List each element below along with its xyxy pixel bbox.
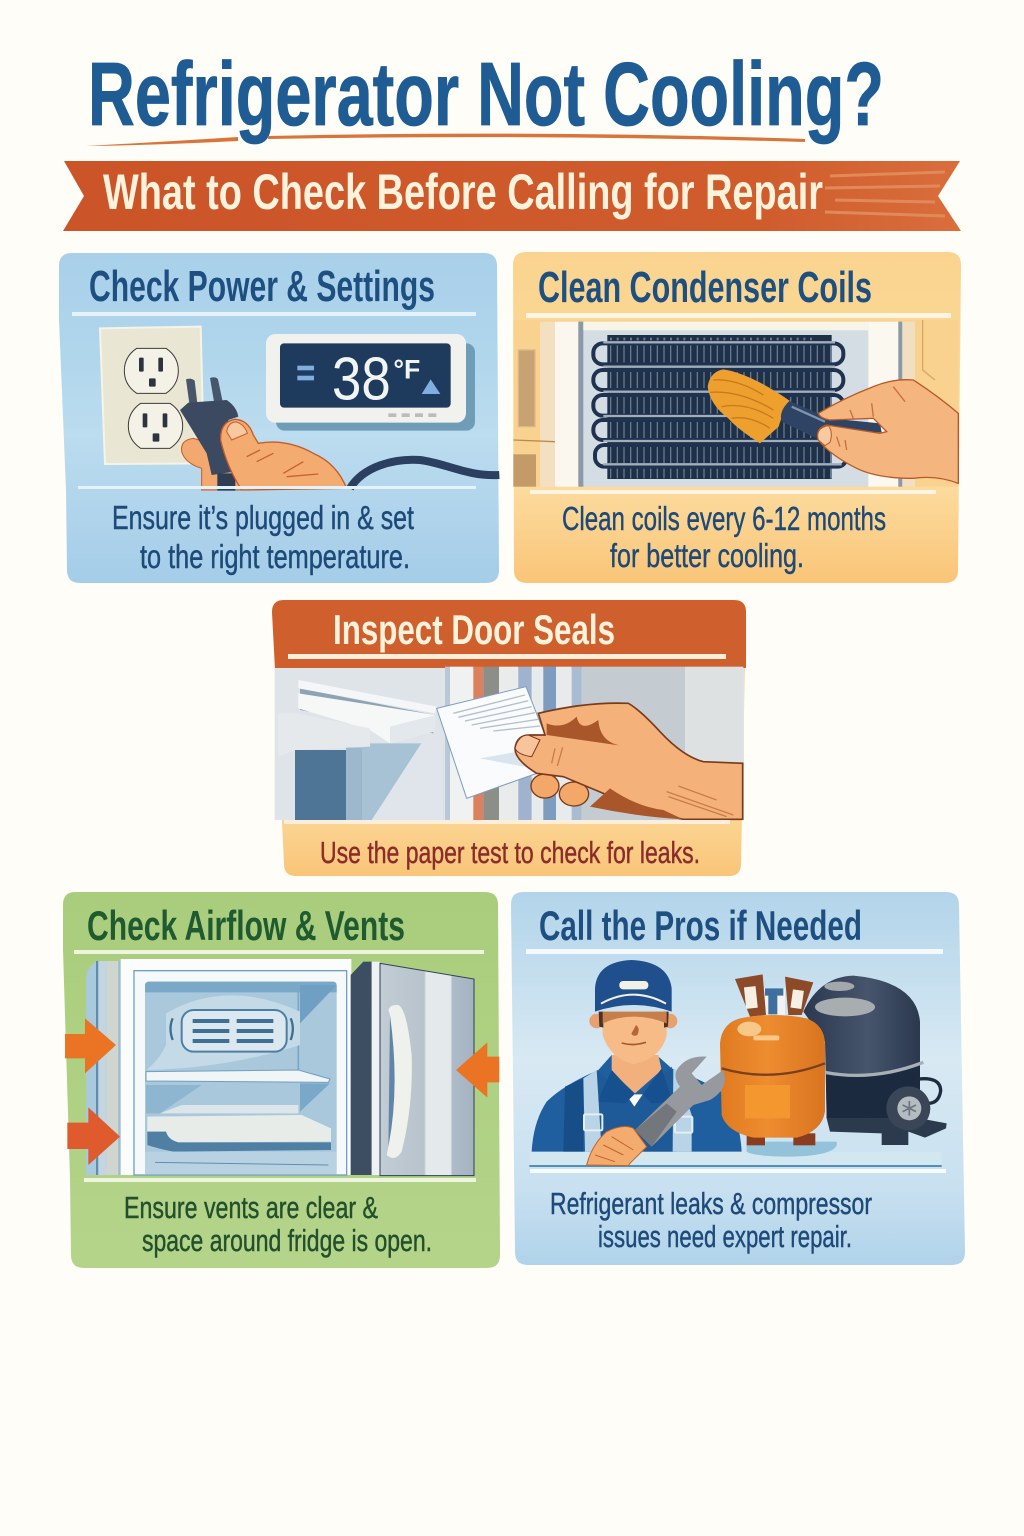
text: power caption: Ensure it’s plugged in & set bbox=[112, 499, 414, 536]
text: power caption bbox=[112, 499, 414, 575]
panel: check airflow and vents bbox=[63, 892, 500, 1268]
heading: condenser coils: Clean Condenser Coils bbox=[538, 263, 872, 312]
text: pros caption: Refrigerant leaks & compressor bbox=[550, 1186, 872, 1221]
panel: clean condenser coils bbox=[513, 252, 961, 583]
icon: fridge door bbox=[351, 962, 474, 1176]
text: coils caption bbox=[562, 500, 886, 574]
heading: call the pros: Call the Pros if Needed bbox=[539, 902, 862, 949]
icon: wrench and hand bbox=[587, 1056, 725, 1166]
illustration: door seal paper test bbox=[275, 667, 744, 820]
text: coils caption: for better cooling. bbox=[610, 537, 804, 574]
panel: check power and settings bbox=[59, 253, 499, 583]
text: pros caption bbox=[550, 1186, 872, 1254]
text: airflow caption bbox=[124, 1190, 432, 1258]
text: power caption: to the right temperature. bbox=[140, 538, 410, 575]
icon: thermostat display bbox=[266, 334, 475, 431]
icon: thermostat display: °F bbox=[393, 355, 420, 385]
panel: inspect door seals bbox=[272, 600, 746, 876]
icon: hand with brush bbox=[708, 369, 958, 483]
icon: technician bbox=[532, 960, 742, 1152]
illustration: coils bbox=[513, 320, 958, 487]
panel: call the pros bbox=[511, 892, 965, 1265]
icon: power cord bbox=[350, 460, 499, 488]
icon: compressor bbox=[815, 982, 947, 1145]
icon: paper sheet bbox=[437, 687, 545, 798]
heading: door seals: Inspect Door Seals bbox=[333, 606, 615, 653]
heading: check power: Check Power & Settings bbox=[89, 262, 435, 311]
text: pros caption: issues need expert repair. bbox=[598, 1219, 852, 1254]
icon: airflow arrows bbox=[65, 1018, 499, 1165]
illustration: outlet, plug and thermostat bbox=[100, 327, 499, 491]
text: coils caption: Clean coils every 6-12 months bbox=[562, 500, 886, 537]
illustration: technician and equipment bbox=[529, 960, 947, 1167]
text: airflow caption: Ensure vents are clear & bbox=[124, 1190, 378, 1225]
icon: hand holding paper bbox=[515, 703, 743, 819]
icon: hand holding plug bbox=[180, 377, 347, 491]
icon: wall outlet bbox=[100, 327, 204, 464]
icon: refrigerant tank bbox=[720, 974, 920, 1145]
text: seals caption: Use the paper test to check for leaks. bbox=[320, 835, 700, 870]
icon: thermostat display: 38 bbox=[332, 345, 391, 412]
illustration: open fridge bbox=[65, 959, 499, 1176]
icon: air vent bbox=[170, 1010, 293, 1052]
text: airflow caption: space around fridge is open. bbox=[142, 1223, 432, 1258]
heading: airflow: Check Airflow & Vents bbox=[87, 902, 405, 949]
